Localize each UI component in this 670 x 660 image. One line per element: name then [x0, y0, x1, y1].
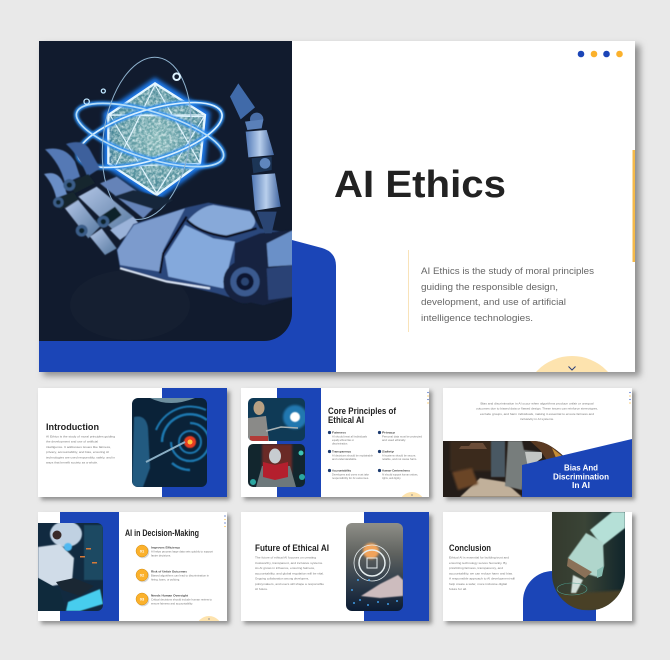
intro paragraph: exclude groups, and harm individuals, making it essential to ensure fairness and: [480, 412, 594, 416]
principle: Accountability: Developers and users must take: [332, 472, 369, 476]
intro paragraph: Bias and discrimination in AI occur when algorithms produce unfair or unequal: [480, 402, 594, 406]
body text: future for all.: [449, 587, 467, 591]
principle: Transparency: Transparency: [332, 450, 351, 454]
principle: Fairness: equally without bias or: [332, 438, 354, 442]
body text: The future of ethical AI focuses on creating: [255, 556, 316, 560]
item 03: [136, 593, 212, 606]
slide dots: [224, 515, 226, 527]
body text: ways that benefit society as a whole.: [46, 461, 98, 465]
principle: Fairness: AI should treat all individuals: [332, 434, 367, 438]
principle: Safety: reliable, and not cause harm.: [382, 457, 417, 461]
principle: Safety: Safety: [382, 450, 394, 454]
item 02: hiring, loans, or policing.: [151, 578, 180, 582]
body text: As AI grows in influence, ensuring fairness,: [255, 566, 315, 570]
photo: robot hand pointing: [552, 512, 625, 610]
heading: Ethical AI: [328, 415, 364, 425]
next button: [198, 616, 220, 621]
item 01: faster decisions.: [151, 554, 171, 558]
description: [421, 266, 594, 324]
body text: privacy, accountability, and bias, ensuring AI: [46, 450, 109, 454]
blue shape behind photo: [39, 240, 336, 372]
description: development, and use of artificial: [421, 297, 566, 308]
thumb: [230, 83, 281, 233]
item 01: Improves Efficiency: [151, 546, 180, 550]
principle: Safety: [378, 450, 417, 461]
item 02: 02: [140, 572, 145, 578]
description: intelligence technologies.: [421, 313, 533, 324]
principle: Accountability: Accountability: [332, 468, 351, 472]
fingers: [66, 142, 100, 177]
principle: Accountability: responsibility for AI outcomes.: [332, 476, 369, 480]
heading: [328, 406, 396, 425]
slide dots: [629, 392, 631, 404]
body text: policymakers, and users will shape a responsible: [255, 582, 324, 586]
photo: robot in workshop: [443, 441, 568, 497]
slide: Conclusion: [443, 512, 635, 624]
panel title: Discrimination: [553, 472, 609, 482]
photo: figure with orb: [248, 398, 307, 441]
crystal: [108, 83, 205, 195]
description divider: [408, 250, 409, 332]
photo: robot reading book: [248, 444, 305, 487]
item 03: Critical decisions should include human review to: [151, 598, 212, 602]
body text: [46, 434, 115, 465]
principle: Fairness: Fairness: [332, 430, 346, 434]
body text: [255, 556, 324, 591]
blue title panel: [522, 439, 632, 497]
panel title: In AI: [572, 481, 590, 490]
principle: Fairness: [328, 430, 367, 446]
intro paragraph: inclusivity in AI systems.: [520, 417, 554, 421]
body text: technologies are used responsibly, safely, and in: [46, 456, 115, 460]
slide: Introduction: [38, 388, 230, 500]
body text: AI future.: [255, 587, 268, 591]
item 03: ensure fairness and accountability.: [151, 602, 193, 606]
slide: AI in Decision-Making: [38, 512, 233, 627]
heading: AI in Decision-Making: [125, 528, 199, 538]
intro paragraph: outcomes due to biased data or flawed design. These issues can reinforce stereotypes,: [476, 407, 598, 411]
heading: Core Principles of: [328, 406, 396, 416]
item 01: 01: [140, 548, 145, 554]
body text: Ongoing collaboration among developers,: [255, 576, 309, 580]
principle: Privacy: Privacy: [382, 430, 395, 434]
panel title: [553, 464, 609, 490]
principle: Fairness: discrimination.: [332, 442, 348, 446]
item 03: Needs Human Oversight: [151, 594, 188, 598]
photo: robot at keyboard: [38, 521, 103, 611]
body text: accountability, and global regulation will be vital.: [255, 571, 324, 575]
body text: ensuring technology serves humanity. By: [449, 561, 507, 565]
photo: robot and target: [132, 398, 209, 487]
panel title: Bias And: [564, 464, 598, 472]
slide: Core Principles of Ethical AI: [241, 388, 435, 503]
principle: Human-Centeredness: rights, and dignity.: [382, 476, 401, 480]
body text: [449, 556, 515, 591]
body text: intelligence. It addresses issues like fairness,: [46, 445, 111, 449]
principle: Safety: AI systems should be secure,: [382, 454, 416, 458]
palm and arm: [117, 203, 293, 305]
decorative dots: [578, 51, 623, 57]
item 01: AI helps process large data sets quickly to support: [151, 550, 213, 554]
heading: Conclusion: [449, 543, 491, 553]
next button: [536, 356, 608, 372]
slide: Bias and Discrimination: [443, 388, 635, 500]
item 01: [136, 545, 213, 558]
slide: Future of Ethical AI: [241, 512, 432, 624]
principle: Human-Centeredness: AI should support human values,: [382, 472, 418, 476]
robot hand photo: [39, 41, 293, 341]
item 02: Biased algorithms can lead to discrimination in: [151, 574, 209, 578]
body text: prioritizing fairness, transparency, and: [449, 566, 503, 570]
principle: Privacy: [378, 430, 422, 442]
body text: help create a safer, more inclusive digital: [449, 582, 507, 586]
blue arch: [523, 571, 596, 621]
body text: AI Ethics is the study of moral principles guiding: [46, 434, 115, 438]
item 02: [136, 569, 209, 582]
principle: Transparency: [328, 450, 373, 461]
principle: Privacy: and used ethically.: [382, 438, 406, 442]
principle: Transparency: AI decisions should be explainable: [332, 454, 373, 458]
body text: the development and use of artificial: [46, 440, 98, 444]
principle: Privacy: Personal data must be protected: [382, 434, 422, 438]
description: guiding the responsible design,: [421, 282, 558, 293]
principle: Transparency: and understandable.: [332, 457, 357, 461]
heading: Future of Ethical AI: [255, 543, 329, 553]
intro paragraph: [476, 402, 598, 421]
main slide: AI Ethics cover: [38, 40, 644, 380]
description: AI Ethics is the study of moral principles: [421, 266, 594, 277]
orbits: [70, 51, 230, 225]
principle: Accountability: [328, 468, 369, 480]
item 03: 03: [140, 596, 145, 602]
yellow edge bar: [632, 150, 635, 262]
next button: [402, 492, 422, 497]
photo: hand with glowing chip: [346, 523, 403, 611]
glow: [108, 83, 205, 195]
body text: A responsible approach to AI development will: [449, 576, 515, 580]
title: AI Ethics: [334, 164, 506, 206]
item 02: Risk of Unfair Outcomes: [151, 570, 187, 574]
heading: Introduction: [46, 422, 99, 433]
principle: Human-Centeredness: [378, 468, 418, 480]
body text: Ethical AI is essential for building trust and: [449, 556, 509, 560]
body text: accountability, we can reduce harm and bias.: [449, 571, 513, 575]
principle: Human-Centeredness: Human-Centeredness: [382, 468, 410, 472]
body text: trustworthy, transparent, and inclusive systems.: [255, 561, 323, 565]
slide dots: [427, 392, 429, 404]
